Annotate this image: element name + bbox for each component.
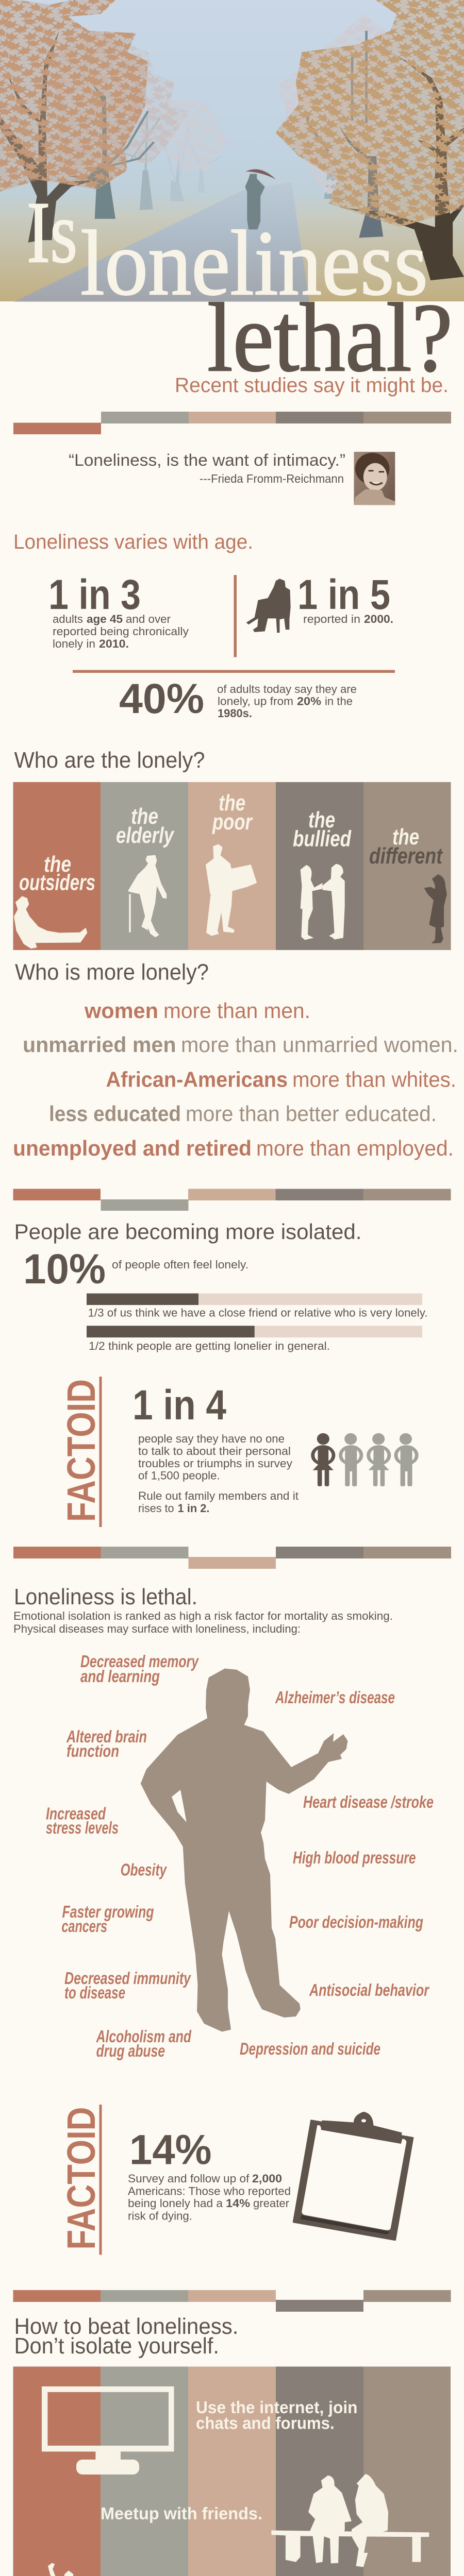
colour bar divider 2	[13, 1189, 451, 1211]
heading: loneliness is lethal: Loneliness is lethal.	[14, 1584, 197, 1609]
factoid 2 text	[128, 2127, 291, 2223]
factoid 2 text: risk of dying.	[128, 2209, 192, 2223]
line: unmarried men	[23, 1032, 458, 1057]
line: unemployed and retired: more than employed.	[256, 1136, 454, 1160]
label: depression: Depression and suicide	[240, 2039, 380, 2058]
stat: 1 in 3: 1 in 3	[48, 571, 141, 618]
list: who is more lonely	[13, 998, 458, 1160]
bar: one half	[87, 1326, 422, 1352]
factoid 2 label: FACTOID	[59, 2107, 104, 2250]
icon: four people, one highlighted	[313, 1433, 417, 1486]
column: the poor	[206, 790, 257, 936]
line: women	[84, 998, 310, 1023]
label: immunity: to disease	[64, 1983, 125, 2002]
icon: seated man	[246, 579, 291, 633]
label: Alzheimer's: Alzheimer’s disease	[275, 1688, 395, 1707]
factoid 1 text: troubles or triumphs in survey	[138, 1457, 292, 1470]
factoid 2 text: 14%	[226, 2197, 250, 2210]
factoid 2 text: Americans: Those who reported	[128, 2185, 291, 2198]
intro text: loneliness is lethal	[13, 1609, 393, 1635]
line: African-Americans: African-Americans	[106, 1067, 288, 1091]
factoid 1 text: people say they have no one	[138, 1432, 285, 1445]
near right tree	[275, 0, 464, 280]
stat: 1 in 3: 2010.	[99, 637, 129, 650]
quote	[69, 451, 345, 485]
column: the different: different	[369, 843, 443, 869]
icon: family holding hands	[48, 2563, 177, 2576]
label: cancers	[61, 1902, 154, 1936]
tip: friends: Meetup with friends.	[101, 2504, 262, 2523]
stat: 10 percent: 10%	[23, 1246, 106, 1293]
bar: one third	[87, 1293, 428, 1319]
factoid 1 text: rises to	[138, 1502, 174, 1515]
label: blood pressure: High blood pressure	[293, 1848, 416, 1867]
stat: 10 percent: of people often feel lonely.	[112, 1258, 248, 1271]
stat: 40 percent: of adults today say they are	[217, 683, 357, 696]
label: altered brain function: Altered brain	[66, 1727, 147, 1746]
stat: 1 in 3: lonely in	[53, 637, 95, 650]
heading: who are the lonely: Who are the lonely?	[14, 748, 205, 773]
heading: how to beat loneliness: Don’t isolate yourself.	[14, 2333, 219, 2359]
road	[14, 182, 309, 301]
label: decreased memory	[80, 1652, 199, 1686]
label: cancers: cancers	[61, 1917, 107, 1936]
label: alcoholism	[96, 2027, 192, 2060]
label: cancers: Faster growing	[62, 1902, 154, 1921]
illness labels	[46, 1652, 434, 2060]
title	[27, 184, 453, 392]
subtitle: Recent studies say it might be.	[175, 374, 449, 397]
column: the different	[369, 824, 447, 943]
stat: 40 percent	[119, 675, 357, 722]
column: the outsiders: the	[44, 852, 71, 877]
factoid 1 text	[132, 1382, 299, 1515]
header illustration: misty park path	[0, 0, 464, 301]
quote: ---Frieda Fromm-Reichmann	[200, 472, 344, 485]
line: less educated: more than better educated.	[186, 1101, 437, 1126]
line: African-Americans	[106, 1067, 456, 1091]
heading: how to beat loneliness: How to beat loneliness.	[14, 2314, 238, 2339]
heading: people are becoming more isolated: People are becoming more isolated.	[14, 1219, 362, 1244]
factoid 2 text: 14%	[129, 2127, 211, 2173]
panel: who are the lonely	[13, 782, 451, 950]
factoid 2 text: being lonely had a	[128, 2197, 223, 2210]
stat: 1 in 3: age 45	[87, 613, 123, 625]
column: the elderly: the	[131, 804, 158, 829]
label: decreased memory: Decreased memory	[80, 1652, 199, 1671]
colour bar divider 3	[13, 1547, 451, 1569]
factoid 2 text: greater	[253, 2197, 289, 2210]
column: the outsiders: outsiders	[19, 870, 95, 895]
stat: 40 percent: 40%	[119, 675, 204, 722]
stat: 1 in 3: adults	[53, 613, 83, 625]
stat: 1 in 3	[48, 571, 189, 650]
horizontal rule	[73, 670, 395, 673]
line: women: more than men.	[163, 998, 310, 1023]
person 1	[313, 1433, 334, 1486]
stat: 1 in 5: reported in	[303, 613, 360, 625]
stat: 40 percent: 1980s.	[218, 707, 252, 720]
label: immunity: Decreased immunity	[64, 1969, 191, 1988]
stat: 1 in 5: 2000.	[364, 613, 393, 625]
factoid 1 text: Rule out family members and it	[138, 1489, 299, 1502]
column: the bullied: bullied	[293, 826, 352, 851]
label: alcoholism: drug abuse	[96, 2041, 165, 2060]
column: the elderly	[116, 804, 175, 937]
line: unmarried men: unmarried men	[23, 1032, 176, 1057]
person 2	[341, 1433, 361, 1486]
distant trees	[119, 73, 228, 210]
figure with umbrella	[245, 169, 276, 229]
stat: 1 in 3: and over	[126, 613, 171, 625]
icon: clipboard	[293, 2112, 413, 2240]
icon: couple on bench	[271, 2474, 429, 2567]
stat: 40 percent: 20%	[297, 694, 321, 708]
colour bar divider 4	[13, 2290, 451, 2312]
label: antisocial: Antisocial behavior	[309, 1980, 430, 1999]
title: lethal?	[207, 284, 453, 392]
silhouette: standing man	[141, 1668, 347, 2032]
vertical divider	[234, 575, 237, 657]
portrait photo	[354, 452, 395, 505]
near left tree	[0, 0, 148, 243]
label: altered brain function: function	[67, 1741, 119, 1760]
mid left tree	[55, 31, 154, 219]
factoid 1 text: 1 in 4	[132, 1382, 226, 1429]
stat: 1 in 3: reported being chronically	[53, 625, 189, 638]
label: stress	[46, 1804, 119, 1837]
line: less educated	[49, 1101, 437, 1126]
line: African-Americans: more than whites.	[292, 1067, 456, 1091]
factoid 1 text: of 1,500 people.	[138, 1469, 220, 1482]
column: the elderly: elderly	[116, 823, 175, 848]
person 4	[396, 1433, 417, 1486]
stat: 40 percent: in the	[325, 694, 353, 708]
tip: internet: chats and forums.	[196, 2413, 335, 2433]
heading: how to beat loneliness	[14, 2314, 238, 2359]
heading: who is more lonely: Who is more lonely?	[15, 959, 209, 985]
stat: 40 percent: lonely, up from	[218, 694, 293, 708]
factoid 1 text: 1 in 2.	[177, 1502, 209, 1515]
label: alcoholism: Alcoholism and	[96, 2027, 192, 2046]
intro text: loneliness is lethal: Physical diseases may surface with loneliness, including:	[13, 1622, 301, 1635]
stat: 1 in 5: 1 in 5	[297, 571, 390, 618]
heading: loneliness varies with age: Loneliness varies with age.	[13, 531, 253, 553]
column: the poor: poor	[212, 809, 253, 835]
bar: one half: 1/2 think people are getting lonelier in general.	[89, 1340, 330, 1352]
column: the bullied	[293, 807, 352, 940]
stat: 10 percent	[23, 1246, 248, 1293]
tip: internet: Use the internet, join	[196, 2398, 358, 2417]
column: the poor: the	[219, 790, 245, 816]
title: loneliness	[80, 212, 428, 314]
tip: internet	[196, 2398, 358, 2433]
factoid 2 text: Survey and follow up of	[128, 2172, 250, 2185]
title: Is	[27, 184, 77, 281]
mid right trees	[278, 14, 400, 238]
label: stress: stress levels	[46, 1818, 119, 1837]
label: obesity: Obesity	[121, 1860, 167, 1879]
colour bar divider 1	[13, 412, 451, 434]
line: unemployed and retired: unemployed and retired	[13, 1136, 252, 1160]
column: the different: the	[392, 824, 419, 850]
label: altered brain function	[66, 1727, 147, 1760]
bar: one third: 1/3 of us think we have a close friend or relative who is very lonely.	[88, 1307, 428, 1319]
line: women: women	[84, 998, 158, 1023]
column: the bullied: the	[308, 807, 335, 833]
factoid 1 text: to talk to about their personal	[138, 1445, 291, 1458]
quote: “Loneliness, is the want of intimacy.”	[69, 451, 345, 469]
person 3	[369, 1433, 389, 1486]
factoid 2 text: 2,000	[252, 2172, 282, 2185]
label: immunity	[64, 1969, 191, 2002]
column: the outsiders	[14, 852, 95, 948]
line: unmarried men: more than unmarried women.	[181, 1032, 458, 1057]
line: less educated: less educated	[49, 1101, 181, 1126]
line: unemployed and retired	[13, 1136, 454, 1160]
icon: computer monitor	[42, 2386, 174, 2475]
factoid 1 label: FACTOID	[59, 1379, 104, 1522]
label: decreased memory: and learning	[80, 1667, 160, 1686]
intro text: loneliness is lethal: Emotional isolation is ranked as high a risk factor for mortality as smoking.	[13, 1609, 393, 1622]
label: stress: Increased	[46, 1804, 106, 1823]
label: poor decision-making: Poor decision-making	[289, 1912, 423, 1931]
panel: how to beat loneliness	[13, 2367, 451, 2576]
